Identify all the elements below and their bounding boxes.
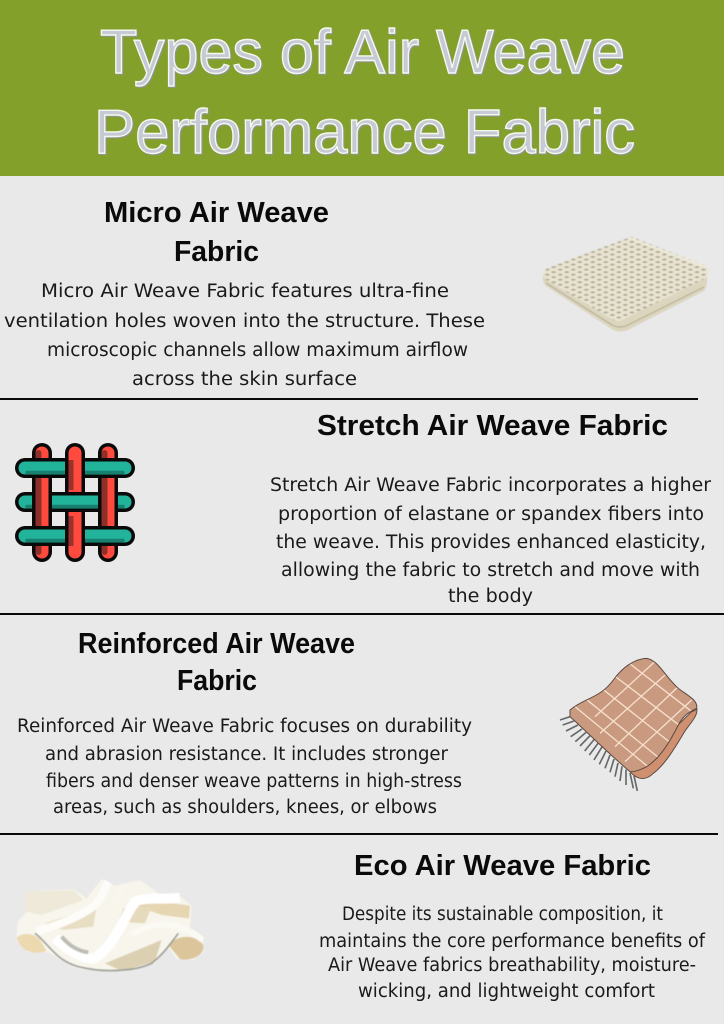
heading: stretch air weave: Stretch Air Weave Fabric [317,410,668,442]
text block: stretch air weave description: allowing the fabric to stretch and move with [281,560,700,581]
text block: micro air weave description: ventilation holes woven into the structure. These [4,311,485,332]
heading: reinforced air weave: Fabric [177,665,257,697]
heading: eco air weave: Eco Air Weave Fabric [354,850,651,882]
text block: stretch air weave description: the body [448,586,533,607]
text block: micro air weave description: microscopic channels allow maximum airflow [47,340,468,361]
text block: eco air weave description [319,904,705,1002]
heading: micro air weave [104,197,329,268]
text block: micro air weave description [4,281,485,390]
text block: stretch air weave description: the weave. This provides enhanced elasticity, [276,532,706,553]
panel: micro air weave [4,197,708,390]
text block: reinforced air weave description: Reinforced Air Weave Fabric focuses on durability [17,716,472,737]
title [94,18,635,167]
text block: reinforced air weave description [17,716,472,818]
heading: micro air weave: Micro Air Weave [104,197,329,229]
panel: reinforced air weave [17,628,698,818]
text block: stretch air weave description: Stretch Air Weave Fabric incorporates a higher [270,475,711,496]
panel: eco air weave [17,850,705,1002]
icon: plaid blanket with fringe [560,658,698,791]
text block: micro air weave description: Micro Air Weave Fabric features ultra-fine [41,281,449,302]
text block: eco air weave description: maintains the core performance benefits of [319,931,705,952]
panel: stretch air weave [25,410,711,607]
heading: micro air weave: Fabric [174,236,259,268]
text block: eco air weave description: Air Weave fabrics breathability, moisture- [328,955,696,976]
heading: reinforced air weave [78,628,355,697]
icon: crumpled eco towel [17,879,204,972]
header banner [0,0,724,176]
icon: folded waffle towel [543,237,708,332]
text block: stretch air weave description: proportion of elastane or spandex fibers into [278,504,704,525]
text block: stretch air weave description [270,475,711,607]
text block: reinforced air weave description: fibers and denser weave patterns in high-stress [46,771,462,792]
text block: micro air weave description: across the skin surface [132,369,357,390]
title: Types of Air Weave [100,18,625,87]
text block: eco air weave description: wicking, and lightweight comfort [358,981,655,1002]
heading: reinforced air weave: Reinforced Air Weave [78,628,355,660]
text block: reinforced air weave description: and abrasion resistance. It includes stronger [45,744,448,765]
title: Performance Fabric [94,98,635,167]
text block: eco air weave description: Despite its sustainable composition, it [342,904,663,925]
text block: reinforced air weave description: areas, such as shoulders, knees, or elbows [53,797,437,818]
icon: woven threads [25,453,125,552]
